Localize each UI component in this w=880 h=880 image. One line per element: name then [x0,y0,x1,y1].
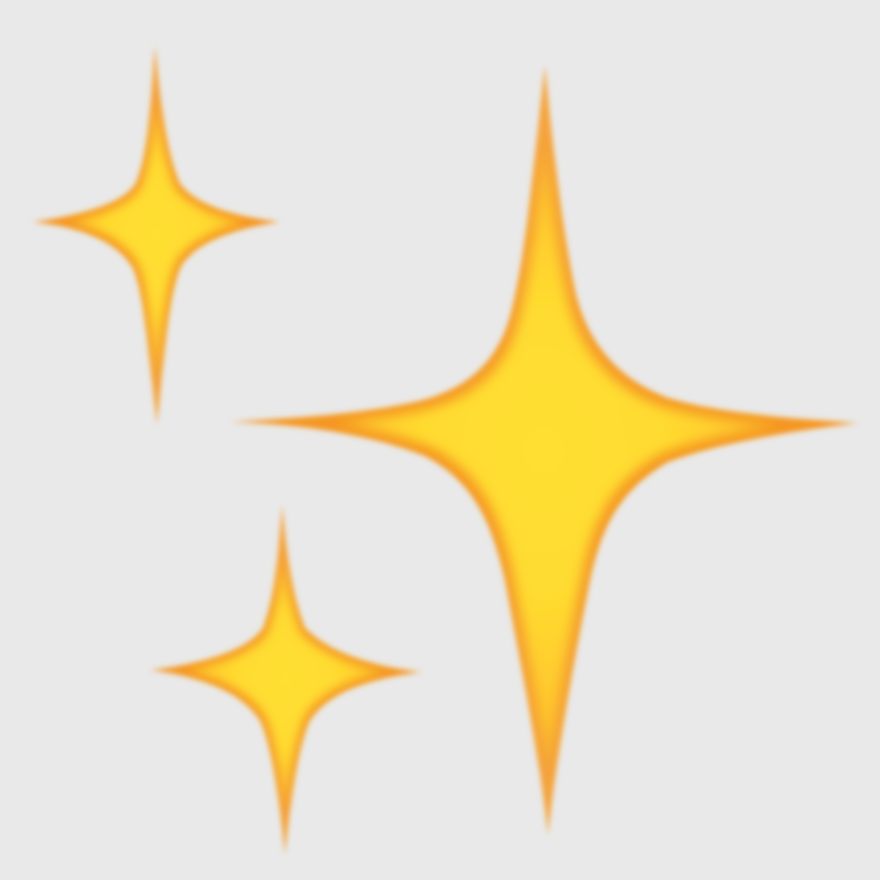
icon: small sparkle, top left [32,45,280,425]
icon: large sparkle, right [230,65,858,835]
icon: small sparkle, bottom [150,505,422,855]
